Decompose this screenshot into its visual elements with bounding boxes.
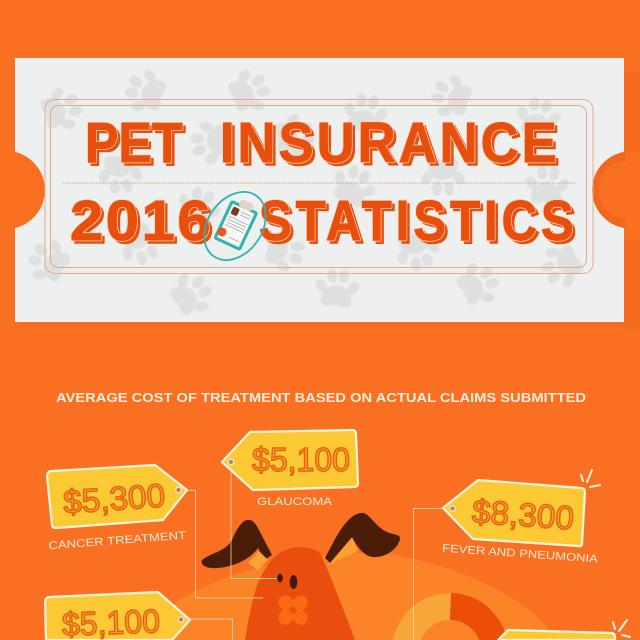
title: 2016 STATISTICS: 2016 [73,192,214,256]
background hill [150,553,552,640]
right ear inner [328,538,358,565]
sparkle: lower right tag [613,620,630,637]
title: 2016 STATISTICS: 2016 [70,189,211,253]
title: PET INSURANCE: INSURANCE [220,110,557,174]
price tag: cancer treatment [47,465,187,552]
title: 2016 STATISTICS [70,189,577,256]
title: 2016 STATISTICS: STATISTICS [262,193,577,256]
donut chart [393,593,507,640]
title: PET INSURANCE: PET [85,111,183,175]
price tag: lower right [498,630,615,640]
heading: average cost: AVERAGE COST OF TREATMENT BASED ON ACTUAL CLAIMS SUBMITTED [56,391,586,405]
left ear inner [248,551,268,570]
dog body [245,547,355,640]
title: 2016 STATISTICS: 2016 [70,189,211,253]
title: PET INSURANCE [85,110,560,178]
title: PET INSURANCE: INSURANCE [220,110,557,174]
price tag: fever and pneumonia: FEVER AND PNEUMONIA [442,543,599,565]
price tag: cancer treatment: CANCER TREATMENT [48,530,187,552]
connector lines [187,462,443,640]
double rounded frame [45,100,593,274]
title: PET INSURANCE: PET [85,111,183,175]
right notch [592,152,640,228]
icon: clipboard with pet record [192,180,278,272]
illustration: dog [202,513,400,640]
price tag: fever and pneumonia [442,480,599,565]
bandage [275,592,311,628]
price tag: glaucoma: $5,100 [252,441,350,478]
paw print pattern [19,61,589,324]
title: 2016 STATISTICS: STATISTICS [259,190,574,253]
title: 2016 STATISTICS: STATISTICS [259,190,574,253]
price tag: fever and pneumonia: $8,300 [471,492,575,537]
left ear [202,520,272,568]
price tag: lower left [45,592,190,640]
price tag: glaucoma [222,430,358,508]
title: PET INSURANCE: INSURANCE [223,113,560,177]
sparkle: fever tag [581,470,600,487]
dotted divider [63,182,575,184]
panel: title ticket [0,58,640,324]
dog eyes [277,574,297,589]
left notch [0,150,45,230]
title: PET INSURANCE: PET [88,114,186,178]
price tag: cancer treatment: $5,300 [62,476,166,521]
ticket shadow [20,72,640,330]
price tag: glaucoma: GLAUCOMA [257,496,333,508]
right ear [325,513,400,563]
